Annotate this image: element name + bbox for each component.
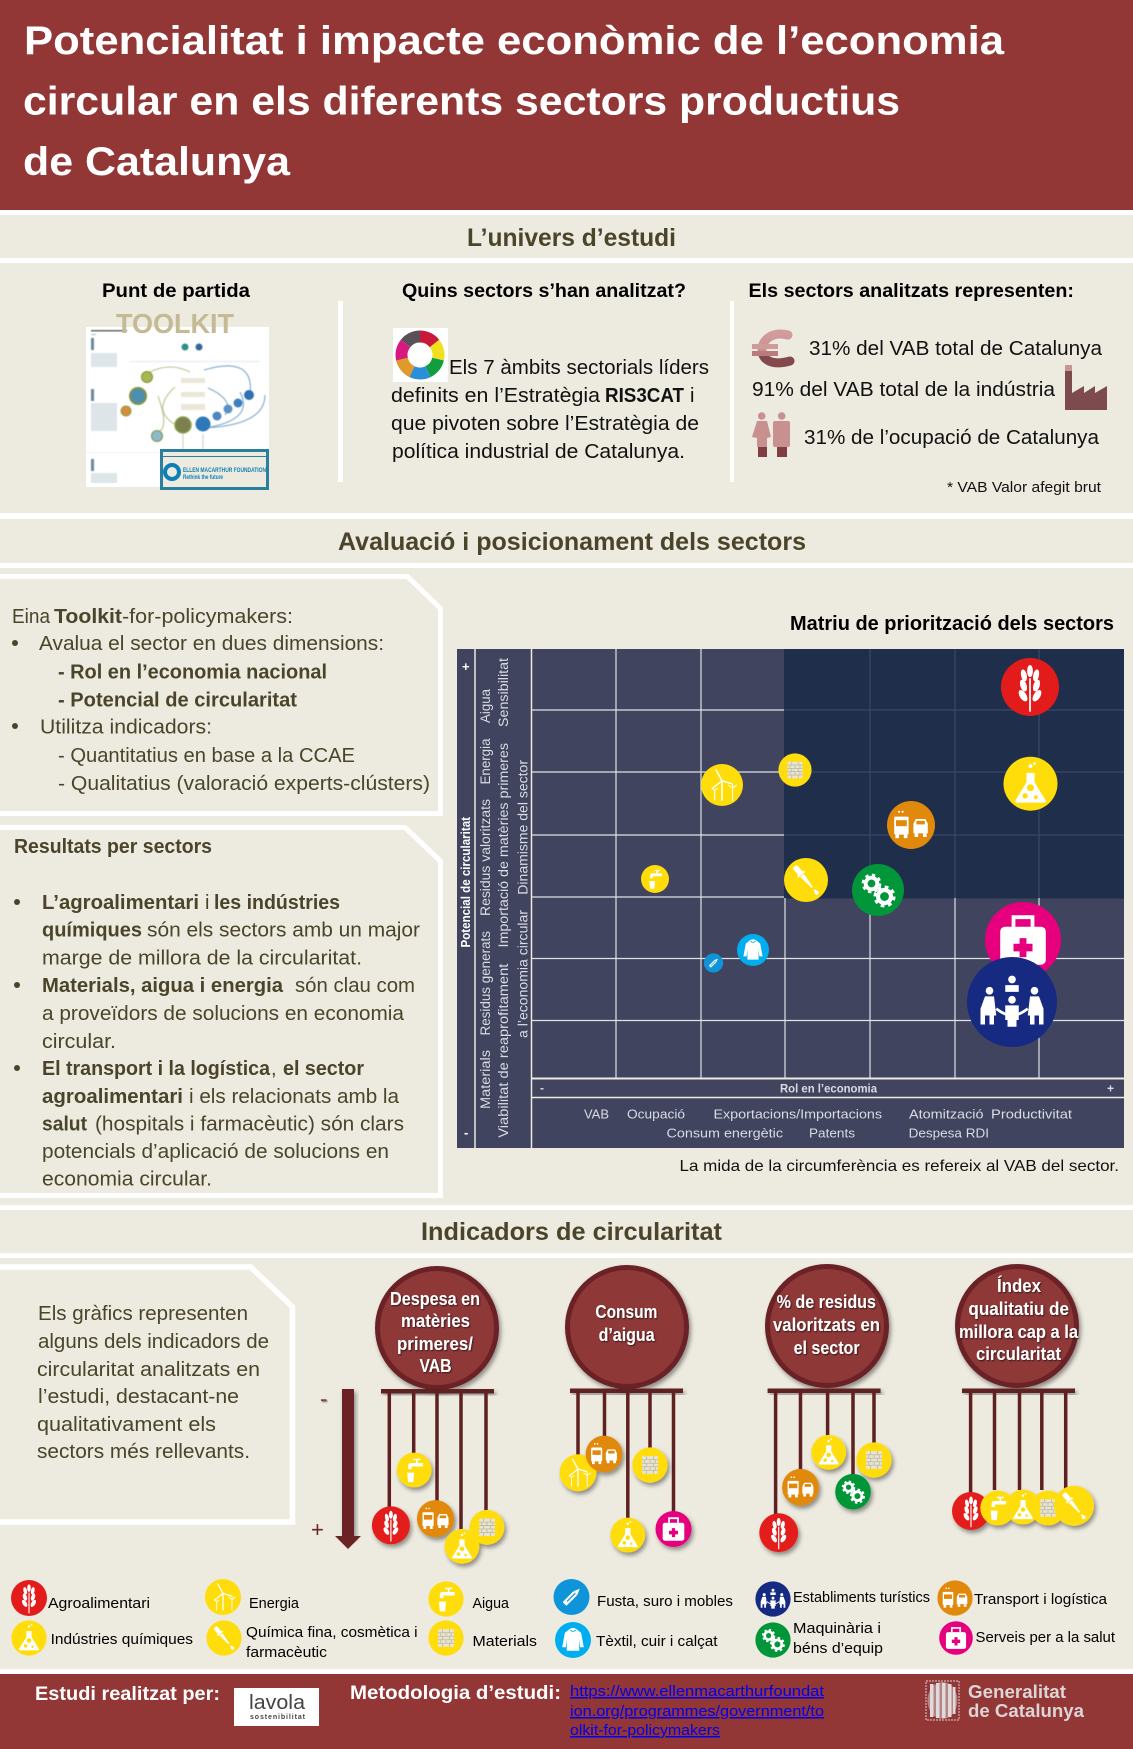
indicator: % de residus valoritzats: % de residus [777,1292,876,1312]
title banner: de Catalunya [23,140,291,184]
bubble: transport [887,801,935,849]
axis indicators: role [584,1106,1072,1141]
panel: Resultats per sectors [0,828,440,1196]
panel: Resultats per sectors: agroalimentari [42,1086,183,1108]
legend: Tèxtil, cuir i calçat [596,1634,718,1650]
panel: Resultats per sectors: les indústries [214,892,340,914]
legend: Indústries químiques [51,1632,193,1648]
link: methodology URL: ion.org/programmes/government/to [570,1703,824,1720]
column: Quins sectors [391,281,709,463]
link: methodology URL: https://www.ellenmacarthurfoundat [570,1683,825,1700]
caption: matrix note: La mida de la circumferència es refereix al VAB del sector. [680,1158,1119,1175]
indicator: Despesa en matèries primeres: primeres/ [397,1334,473,1354]
bubble: salut [985,902,1061,978]
panel: indicators intro: sectors més rellevants. [37,1441,250,1463]
panel: Eina Toolkit: - Quantitatius en base a la CCAE [58,745,355,767]
axis label: Potencial de circularitat: Potencial de circularitat [459,816,473,948]
axis indicators: role: Consum energètic [666,1126,784,1141]
heading: Quins sectors: Quins sectors s’han analitzat? [402,281,686,302]
indicator: Índex qualitatiu [952,1266,1094,1530]
axis indicators: circularity: Dinamisme del sector [516,759,530,895]
indicator: Consum d'aigua: Consum [595,1302,657,1322]
panel: Resultats per sectors: (hospitals i farmacèutic) són clars [95,1114,404,1136]
legend: Química fina, cosmètica i [246,1625,418,1641]
icon: sector wheel [393,328,448,382]
icon: people [752,412,790,457]
panel: Eina Toolkit: Utilitza indicadors: [40,716,212,738]
panel: Eina Toolkit: Toolkit [54,606,122,628]
legend: Aigua [472,1596,510,1612]
title banner: Potencialitat i impacte econòmic de l’economia [24,19,1005,63]
title banner [0,0,1133,210]
legend: Energia [249,1596,300,1612]
axis label: Rol en l'economia: + [1107,1082,1114,1096]
axis label: Potencial de circularitat [459,659,473,1140]
legend: béns d’equip [793,1641,883,1657]
heading: L'univers d'estudi: L’univers d’estudi [467,224,676,252]
logo: Generalitat de Catalunya: de Catalunya [968,1701,1085,1721]
legend: Transport i logística [974,1592,1108,1608]
axis indicators: role: Ocupació [627,1106,685,1122]
legend: Serveis per a la salut [976,1630,1115,1646]
text: sectors description: i [690,385,694,407]
panel: Resultats per sectors: químiques [42,920,142,942]
panel: Resultats per sectors: L’agroalimentari [42,892,199,914]
panel: Eina Toolkit [0,576,440,814]
indicator: Despesa en matèries primeres [372,1268,504,1564]
icon: euro [752,334,790,363]
panel: Resultats per sectors: potencials d’aplicació de solucions en [42,1141,389,1163]
label: Metodologia d'estudi: Metodologia d’estudi: [350,1683,561,1704]
legend [11,1579,1115,1661]
panel: Eina Toolkit: - Rol en l’economia nacional [58,662,327,684]
panel: Resultats per sectors: Resultats per sectors [14,836,212,858]
axis indicators: circularity: Importació de matèries primeres [496,743,511,948]
panel: Resultats per sectors: i els relacionats amb la [189,1086,400,1108]
logo: lavola: lavola [249,1692,306,1714]
axis indicators: circularity: a l’economia circular [516,909,530,1038]
bubble: tèxtil [737,934,769,966]
link: methodology URL: olkit-for-policymakers [570,1722,720,1739]
indicator: Índex qualitatiu: millora cap a la [959,1322,1079,1342]
footnote: * VAB Valor afegit brut [947,479,1102,496]
bubble: agroalimentari [1001,658,1059,716]
panel: Resultats per sectors: circular. [42,1031,116,1053]
footer [0,1674,1133,1749]
stat: VAB indústria: 91% del VAB total de la indústria [752,379,1056,401]
legend: Materials [472,1634,537,1650]
indicator: Consum d'aigua [560,1268,692,1552]
text: sectors description: RIS3CAT [605,385,684,407]
axis indicators: circularity: Energia [478,738,493,784]
column: sector statistics [748,281,1107,496]
chart: prioritisation matrix [457,649,1124,1148]
hanging sector icons [759,1435,892,1552]
axis label: Rol en l'economia: - [540,1081,544,1095]
axis indicators: role: Exportacions/Importacions [714,1106,883,1122]
panel: Eina Toolkit: - Qualitatius (valoració experts-clústers) [58,773,430,795]
indicator: % de residus valoritzats [759,1266,892,1552]
axis indicators: role: Productivitat [991,1106,1072,1122]
axis indicators: circularity: Residus generats [478,931,493,1036]
arrow: scale - to +: - [320,1386,327,1411]
panel: Eina Toolkit: Avalua el sector en dues dimensions: [39,633,384,655]
axis label: Rol en l'economia [540,1081,1114,1096]
logo: lavola [234,1688,319,1726]
panel: Eina Toolkit: - Potencial de circularitat [58,690,297,712]
legend: Fusta, suro i mobles [597,1594,733,1610]
panel: indicators intro: circularitat analitzats en [37,1359,260,1381]
stat: VAB Catalunya: 31% del VAB total de Catalunya [809,338,1103,360]
axis label: Potencial de circularitat: - [464,1125,468,1140]
axis label: Potencial de circularitat: + [462,659,470,674]
panel: Resultats per sectors: són els sectors amb un major [147,920,420,942]
axis indicators: circularity: Materials [478,1050,493,1109]
axis indicators: circularity: Residus valoritzats [478,799,493,916]
Ellen MacArthur Foundation box: Rethink the future [183,475,224,481]
bubble: turisme [967,957,1057,1047]
panel: Resultats per sectors: i [205,892,209,914]
panel: Resultats per sectors: a proveïdors de solucions en economia [42,1003,405,1025]
panel: indicators intro: alguns dels indicadors de [38,1331,269,1353]
arrow: scale - to +: + [311,1517,324,1542]
legend: farmacèutic [246,1645,327,1661]
panel: Resultats per sectors: el sector [283,1058,364,1080]
link: methodology URL [570,1683,825,1739]
bubble: materials [778,753,812,787]
axis indicators: circularity: Sensibilitat [496,658,511,727]
panel: indicators intro: qualitativament els [37,1414,216,1436]
bubble: aigua [641,865,669,893]
panel: Resultats per sectors: economia circular. [42,1168,212,1190]
indicator: Despesa en matèries primeres: VAB [420,1356,452,1376]
credit: Estudi realitzat per: Estudi realitzat per: [35,1684,220,1705]
indicator: % de residus valoritzats: valoritzats en [773,1315,880,1335]
label: TOOLKIT: TOOLKIT [116,308,234,339]
hanging sector icons [952,1486,1094,1530]
panel: Resultats per sectors: són clau com [295,975,415,997]
arrow: scale - to + [311,1386,361,1549]
icon: factory [1065,365,1107,410]
panel: Eina Toolkit: Eina [12,606,51,628]
toolkit diagram image [86,327,269,488]
bubble: energia [701,764,743,806]
panel: Resultats per sectors: Materials, aigua i energia [42,975,284,997]
panel: Resultats per sectors: marge de millora de la circularitat. [42,948,362,970]
indicator: Consum d'aigua: d’aigua [599,1325,655,1345]
panel: Resultats per sectors: salut [42,1114,87,1136]
axis indicators: role: Patents [809,1126,856,1141]
logo: Generalitat de Catalunya [926,1681,1085,1721]
axis indicators: circularity: Aigua [478,689,493,723]
indicator: Índex qualitatiu: circularitat [976,1344,1061,1364]
hanging sector icons [372,1453,504,1564]
Ellen MacArthur Foundation box: ELLEN MACARTHUR FOUNDATION [183,467,266,474]
Ellen MacArthur Foundation box [162,450,268,488]
legend: Maquinària i [793,1621,881,1637]
panel: Resultats per sectors: El transport i la logística [42,1058,271,1080]
heading: Punt de partida: Punt de partida [102,281,250,302]
indicator: Despesa en matèries primeres: matèries [401,1311,470,1331]
hanging sector icons [560,1436,692,1552]
panel: Resultats per sectors: , [271,1058,277,1080]
logo: lavola: sostenibilitat [250,1714,306,1721]
axis indicators: role: Despesa RDI [909,1126,989,1141]
bubble: química fina [784,858,828,902]
indicator: Índex qualitatiu: qualitatiu de [968,1299,1069,1319]
heading: Matriu: Matriu de priorització dels sectors [790,613,1114,635]
bubble: fusta [704,953,723,973]
bubble: maquinària [852,864,904,916]
stat: ocupació: 31% de l’ocupació de Catalunya [804,427,1100,449]
panel: indicators intro [0,1267,292,1522]
text: sectors description: definits en l’Estratègia [391,385,601,407]
logo: Generalitat de Catalunya: Generalitat [968,1682,1066,1702]
text: sectors description [391,357,709,463]
axis indicators: circularity [478,658,530,1138]
panel: Eina Toolkit: -for-policymakers: [122,606,293,628]
legend: Establiments turístics [793,1590,930,1606]
panel: indicators intro: l’estudi, destacant-ne [38,1386,239,1408]
axis label: Rol en l'economia: Rol en l’economia [780,1082,877,1096]
indicator: Despesa en matèries primeres: Despesa en [390,1289,480,1309]
heading: Indicadors: Indicadors de circularitat [421,1218,723,1246]
indicator: Índex qualitatiu: Índex [997,1275,1041,1296]
heading: statistics: Els sectors analitzats representen: [748,281,1074,302]
column: Punt de partida [86,281,269,488]
heading: Avaluació: Avaluació i posicionament dels sectors [338,528,806,556]
indicator: % de residus valoritzats: el sector [794,1338,860,1358]
legend: Agroalimentari [48,1596,150,1612]
text: sectors description: que pivoten sobre l’Estratègia de [391,413,699,435]
panel: indicators intro: Els gràfics representen [38,1303,248,1325]
text: sectors description: Els 7 àmbits sectorials líders [449,357,709,379]
title banner: circular en els diferents sectors productius [23,80,900,124]
text: sectors description: política industrial de Catalunya. [392,441,685,463]
axis indicators: role: VAB [584,1106,609,1122]
bubble: indústries químiques [1004,757,1058,811]
axis indicators: circularity: Viabilitat de reaprofitament [496,963,511,1138]
axis indicators: role: Atomització [909,1106,984,1122]
